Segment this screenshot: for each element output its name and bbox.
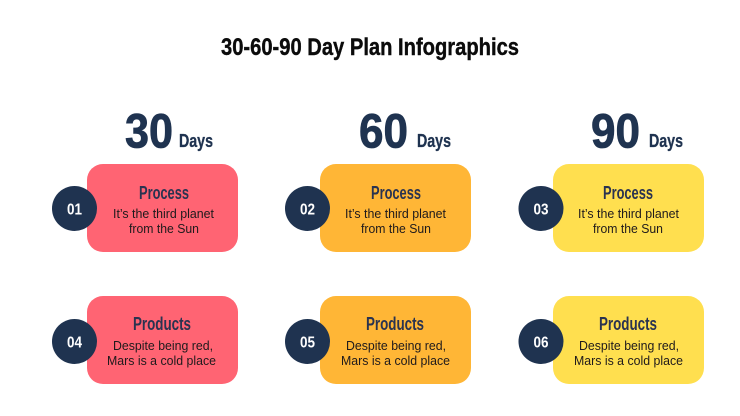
panel: card 06: Products — [599, 314, 657, 334]
panel: card 01: from the Sun — [129, 222, 199, 236]
panel: card 04: Despite being red, — [113, 339, 213, 353]
panel: card 02 — [285, 164, 471, 252]
heading: 90 days — [591, 106, 683, 158]
panel: card 02: from the Sun — [361, 222, 431, 236]
heading: 60 days — [359, 106, 451, 158]
panel: card 06 — [518, 296, 704, 384]
panel: card 03 — [518, 164, 704, 252]
panel: card 05: Products — [366, 314, 424, 334]
panel: card 05 — [285, 296, 471, 384]
panel: card 05: 05 — [300, 334, 315, 352]
panel: card 03: Process — [603, 183, 653, 203]
panel: card 06: Despite being red, — [579, 339, 679, 353]
panel: card 02: Process — [371, 183, 421, 203]
heading: 90 days: Days — [649, 131, 683, 151]
panel: card 04: Products — [133, 314, 191, 334]
panel: card 04 — [52, 296, 238, 384]
panel: card 03: It’s the third planet — [578, 207, 680, 221]
title: 30-60-90 Day Plan Infographics — [221, 34, 519, 61]
panel: card 04: 04 — [67, 334, 82, 352]
panel: card 02: 02 — [300, 202, 315, 218]
heading: 60 days: Days — [417, 131, 451, 151]
panel: card 06: 06 — [534, 334, 549, 352]
heading: 90 days: 90 — [591, 106, 640, 158]
heading: 30 days: Days — [179, 131, 213, 151]
panel: card 01: 01 — [67, 202, 82, 218]
panel: card 05: Mars is a cold place — [341, 354, 450, 368]
panel: card 01: Process — [139, 183, 189, 203]
panel: card 05: Despite being red, — [346, 339, 446, 353]
panel: card 06: Mars is a cold place — [574, 354, 683, 368]
panel: card 01: It’s the third planet — [113, 207, 215, 221]
panel: card 04: Mars is a cold place — [107, 354, 216, 368]
heading: 30 days: 30 — [125, 106, 173, 158]
panel: card 02: It’s the third planet — [345, 207, 447, 221]
panel: card 01 — [52, 164, 238, 252]
panel: card 03: 03 — [534, 202, 549, 218]
heading: 30 days — [125, 106, 213, 158]
panel: card 03: from the Sun — [593, 222, 663, 236]
heading: 60 days: 60 — [359, 106, 408, 158]
